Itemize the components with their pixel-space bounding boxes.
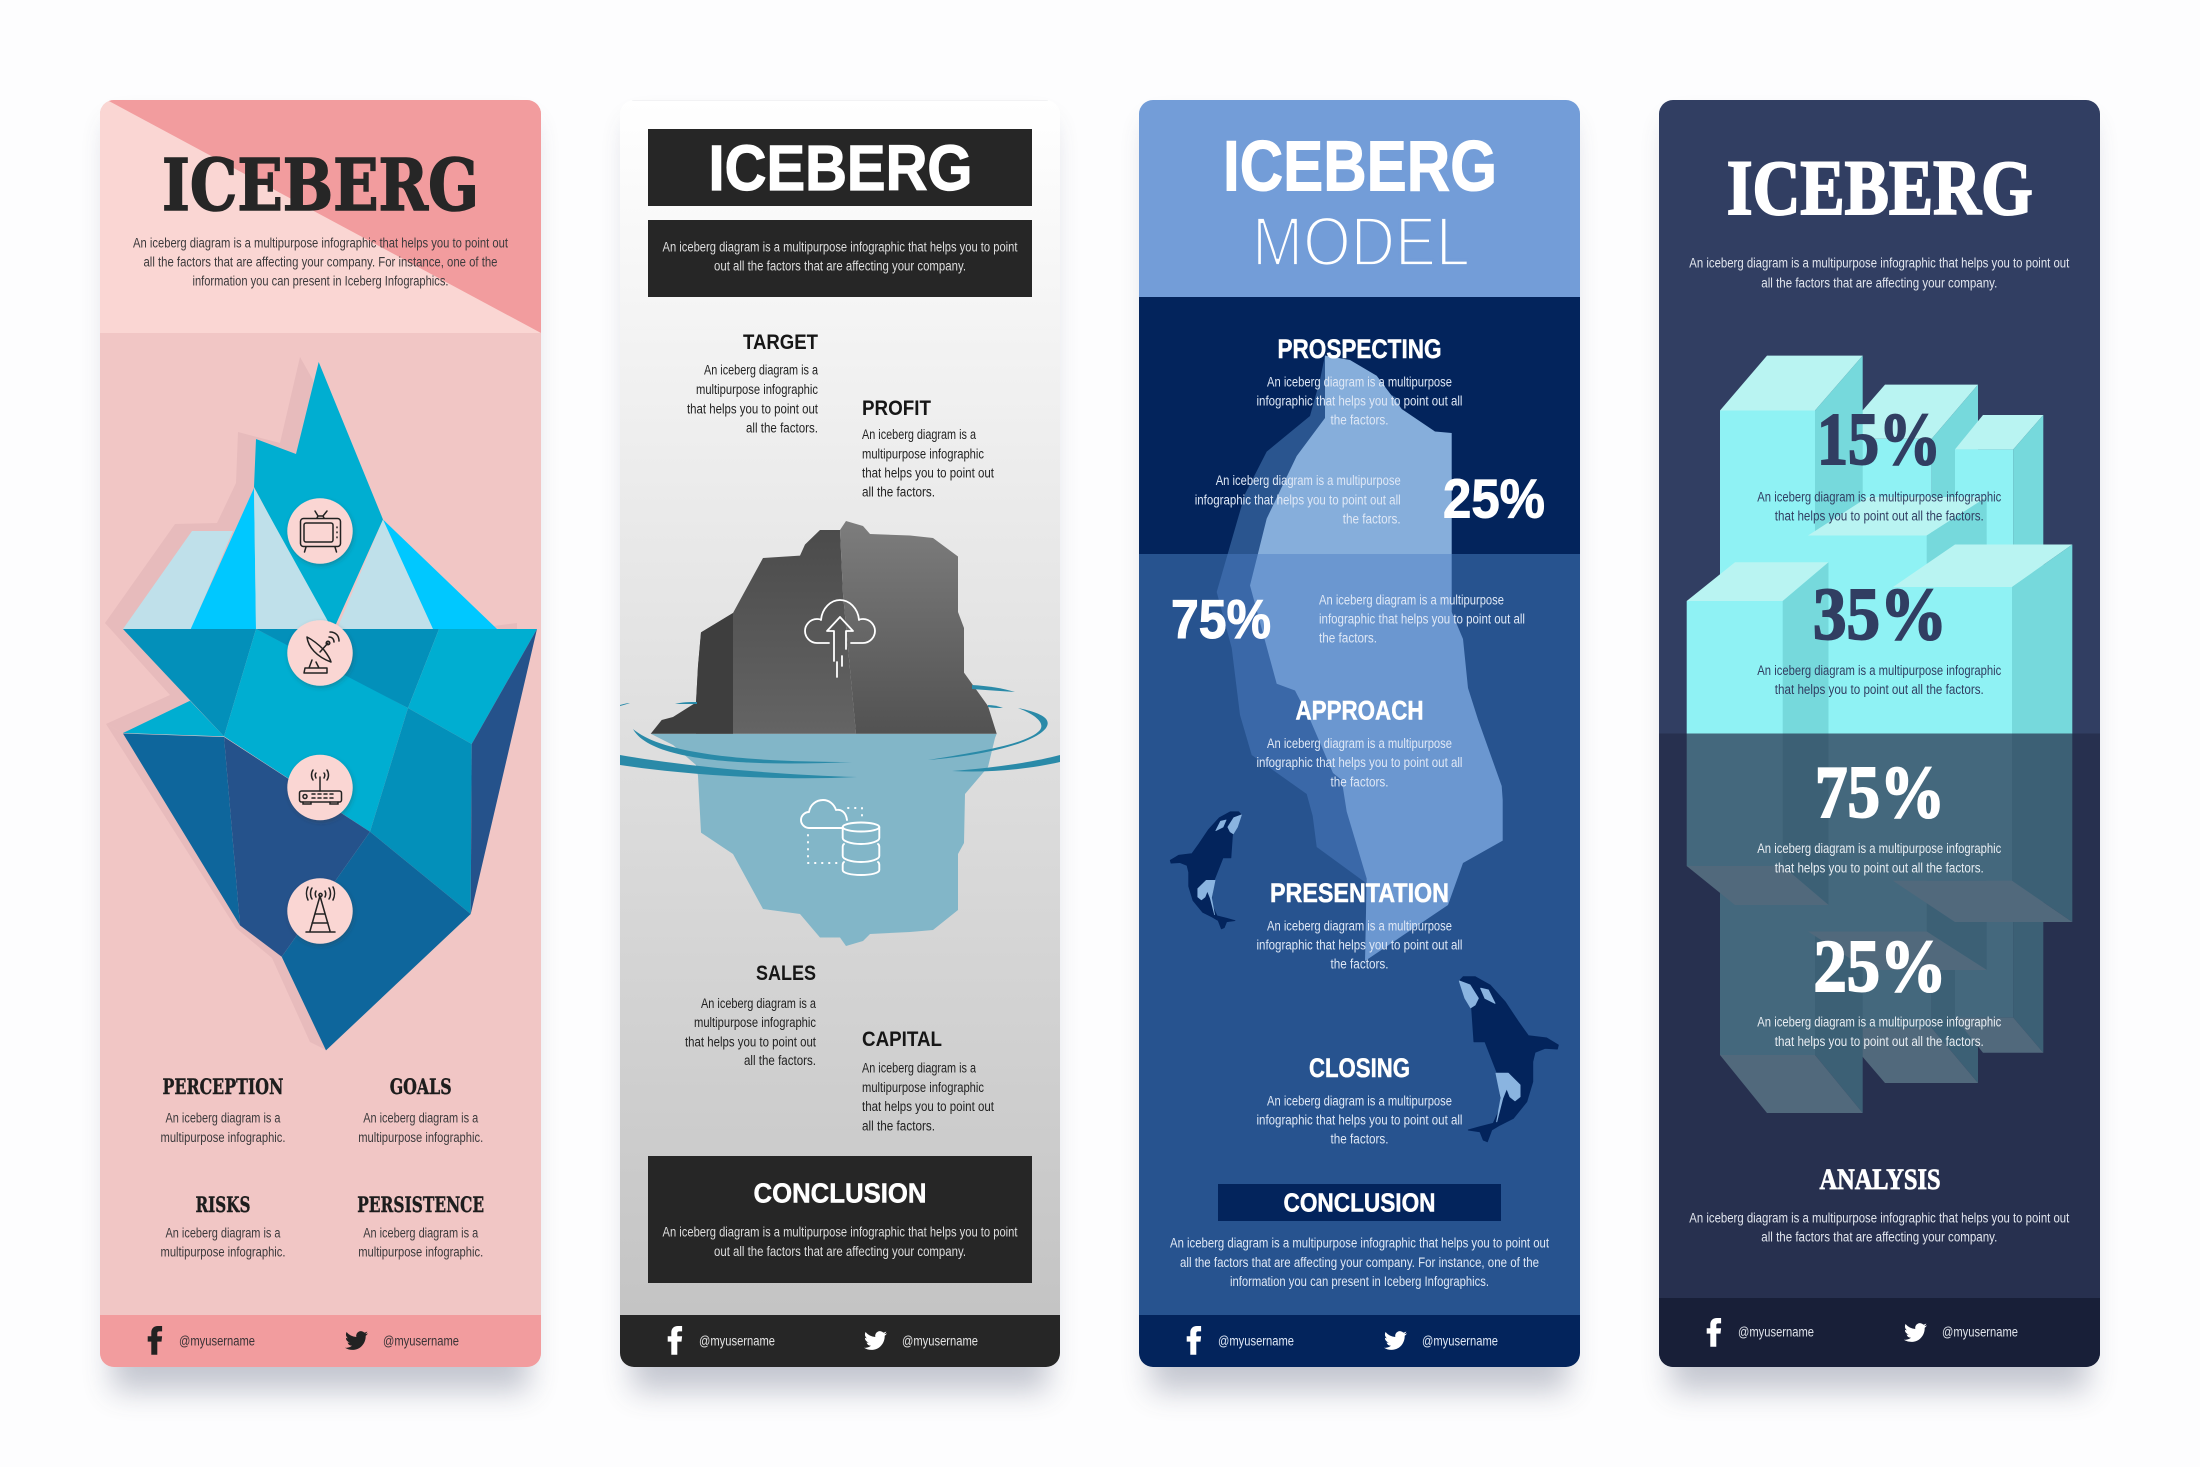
icon: router (287, 755, 353, 820)
stat: 25%: infographic that helps you to point out all (1195, 492, 1401, 508)
item: perception: PERCEPTION (162, 1074, 284, 1099)
footer: social: @myusername (1218, 1334, 1294, 1348)
intro text: An iceberg diagram is a multipurpose infographic that helps you to point out (133, 236, 508, 250)
icon: cloud upload (805, 600, 875, 677)
intro text: all the factors that are affecting your company. (1761, 276, 1997, 290)
item: target: all the factors. (746, 420, 818, 436)
item: capital: all the factors. (862, 1118, 935, 1134)
stat: 25%: An iceberg diagram is a multipurpose (1216, 473, 1401, 488)
intro text (1689, 256, 2069, 290)
stat: 25%: that helps you to point out all the factors. (1775, 1034, 1984, 1049)
stat: 25%: 25% (1443, 468, 1545, 530)
stat: 15%: 15% (1817, 399, 1941, 481)
icon: radio tower (287, 878, 353, 944)
water overlay (1659, 734, 2100, 1298)
item: sales: multipurpose infographic (694, 1015, 816, 1030)
panel: grey iceberg card (620, 100, 1060, 1367)
conclusion box: out all the factors that are affecting your company. (714, 1244, 966, 1259)
item: profit: that helps you to point out (862, 466, 994, 480)
footer: social (1139, 1315, 1580, 1367)
stat: 75%: 75% (1171, 588, 1271, 650)
footer: social: @myusername (1738, 1324, 1814, 1340)
title: ICEBERG (1223, 128, 1497, 206)
panel: pink iceberg card (100, 100, 541, 1367)
item: target: that helps you to point out (687, 402, 818, 416)
stat: 15%: An iceberg diagram is a multipurpose infographic (1757, 490, 2002, 504)
footer: social (1659, 1298, 2100, 1367)
intro text: all the factors that are affecting your company. For instance, one of the (144, 254, 498, 270)
section: closing: CLOSING (1309, 1053, 1410, 1083)
stat: 35%: that helps you to point out all the factors. (1775, 682, 1984, 697)
item: target: An iceberg diagram is a (704, 362, 818, 378)
item: goals (358, 1074, 483, 1145)
stat: 15% (1757, 399, 2002, 524)
intro text: information you can present in Iceberg Infographics. (192, 274, 448, 288)
item: risks: RISKS (196, 1192, 250, 1217)
item: risks: An iceberg diagram is a (166, 1226, 281, 1240)
iceberg: underwater part (651, 734, 997, 946)
item: profit: multipurpose infographic (862, 446, 984, 462)
footer: social (100, 1315, 541, 1367)
stat: 75%: that helps you to point out all the factors. (1775, 860, 1984, 876)
item: persistence (357, 1192, 484, 1260)
stat: 75% (1172, 594, 1524, 642)
section: presentation: PRESENTATION (1270, 878, 1449, 908)
item: goals: multipurpose infographic. (358, 1130, 483, 1145)
conclusion: An iceberg diagram is a multipurpose infographic that helps you to point out (1170, 1236, 1549, 1250)
section: prospecting (1256, 334, 1462, 428)
3D iceberg blocks (1687, 356, 2072, 1113)
item: target: TARGET (743, 331, 818, 354)
stat: 35%: 35% (1813, 574, 1947, 656)
section: prospecting: PROSPECTING (1278, 334, 1442, 364)
item: capital: that helps you to point out (862, 1099, 994, 1114)
footer: social: @myusername (1942, 1324, 2018, 1340)
item: profit: all the factors. (862, 484, 935, 500)
item: capital (862, 1028, 994, 1134)
item: goals: An iceberg diagram is a (363, 1110, 479, 1126)
item: perception: An iceberg diagram is a (166, 1110, 281, 1126)
item: sales: SALES (756, 962, 816, 985)
conclusion box (648, 1156, 1032, 1283)
icon: satellite dish (287, 620, 353, 686)
analysis: An iceberg diagram is a multipurpose infographic that helps you to point out (1689, 1210, 2069, 1226)
item: target (687, 331, 818, 436)
intro text (648, 220, 1032, 297)
stat: 35%: An iceberg diagram is a multipurpose infographic (1757, 663, 2002, 678)
block: middle (1808, 497, 1987, 970)
water ripples (620, 685, 1060, 778)
item: profit: PROFIT (862, 397, 931, 420)
item: persistence: An iceberg diagram is a (363, 1226, 479, 1240)
block: back right (1955, 415, 2043, 1053)
footer: social: @myusername (1422, 1334, 1498, 1348)
conclusion (1170, 1184, 1549, 1289)
section: presentation: infographic that helps you to point out all (1256, 938, 1462, 952)
icon: large orca (1459, 977, 1558, 1142)
stat: 75%: the factors. (1319, 630, 1377, 646)
section: approach: An iceberg diagram is a multipurpose (1267, 736, 1452, 751)
item: sales: all the factors. (744, 1053, 816, 1068)
icon: small orca (1170, 812, 1242, 929)
stat: 25% (1196, 475, 1544, 524)
title (1226, 140, 1494, 265)
stat: 75%: 75% (1815, 752, 1945, 834)
stat: 75%: An iceberg diagram is a multipurpose infographic (1757, 841, 2002, 856)
analysis: ANALYSIS (1820, 1163, 1940, 1196)
block: back left (1720, 356, 1863, 1113)
conclusion box: An iceberg diagram is a multipurpose infographic that helps you to point (662, 1224, 1018, 1240)
section: closing: An iceberg diagram is a multipurpose (1267, 1094, 1452, 1108)
stat: 25%: 25% (1814, 926, 1946, 1008)
header background (100, 100, 541, 333)
intro text: An iceberg diagram is a multipurpose infographic that helps you to point (662, 240, 1018, 254)
analysis: all the factors that are affecting your company. (1761, 1230, 1997, 1244)
conclusion box: CONCLUSION (754, 1178, 926, 1208)
title: MODEL (1252, 202, 1470, 280)
footer: social: @myusername (383, 1334, 459, 1348)
title: ICEBERG (708, 132, 972, 204)
item: sales: that helps you to point out (685, 1034, 816, 1050)
section: presentation: the factors. (1330, 956, 1388, 972)
item: perception (160, 1074, 286, 1145)
item: sales (685, 962, 816, 1068)
stat: 75% (1757, 752, 2002, 876)
title: ICEBERG (1727, 144, 2033, 231)
iceberg: rock above water (651, 521, 997, 734)
stat: 35% (1757, 574, 2002, 697)
section: approach: infographic that helps you to point out all (1256, 755, 1462, 770)
card shadows (112, 125, 2088, 1391)
stat: 75%: infographic that helps you to point out all (1319, 612, 1525, 626)
section: prospecting: the factors. (1330, 412, 1388, 428)
item: profit: An iceberg diagram is a (862, 427, 976, 442)
panel: navy 3D iceberg card (1659, 100, 2100, 1367)
item: risks: multipurpose infographic. (160, 1244, 286, 1260)
iceberg diagram (105, 357, 537, 1050)
item: risks (160, 1192, 286, 1260)
top edge line (632, 100, 1048, 101)
intro text: out all the factors that are affecting your company. (714, 258, 966, 274)
section: approach: the factors. (1330, 774, 1388, 790)
item: goals: GOALS (390, 1074, 452, 1099)
footer: social (620, 1315, 1060, 1367)
stat: 15%: that helps you to point out all the factors. (1775, 508, 1984, 524)
intro text (133, 236, 508, 288)
item: persistence: multipurpose infographic. (358, 1244, 483, 1260)
section: closing (1256, 1053, 1462, 1146)
item: capital: CAPITAL (862, 1028, 942, 1051)
block: back centre (1838, 385, 1978, 1083)
footer: social: @myusername (179, 1334, 255, 1348)
block: front left (1687, 562, 1828, 905)
item: sales: An iceberg diagram is a (701, 996, 816, 1011)
conclusion: all the factors that are affecting your company. For instance, one of the (1180, 1255, 1539, 1270)
item: persistence: PERSISTENCE (357, 1192, 484, 1217)
section: approach (1256, 696, 1462, 790)
icon: television (287, 498, 353, 564)
panel: blue iceberg model card (1139, 100, 1580, 1367)
iceberg silhouette (1217, 355, 1503, 961)
analysis (1689, 1163, 2069, 1244)
block: front right (1830, 544, 2072, 922)
section: closing: infographic that helps you to point out all (1256, 1112, 1462, 1128)
icon: cloud database (801, 800, 879, 875)
item: target: multipurpose infographic (696, 382, 818, 397)
section: closing: the factors. (1330, 1132, 1388, 1146)
title: ICEBERG (162, 143, 479, 227)
item: capital: multipurpose infographic (862, 1080, 984, 1095)
stat: 25% (1757, 926, 2002, 1049)
intro text: An iceberg diagram is a multipurpose infographic that helps you to point out (1689, 256, 2069, 270)
stat: 75%: An iceberg diagram is a multipurpose (1319, 592, 1504, 608)
footer: social: @myusername (902, 1334, 978, 1348)
item: capital: An iceberg diagram is a (862, 1060, 976, 1076)
section: prospecting: infographic that helps you to point out all (1256, 394, 1462, 408)
section: presentation (1256, 878, 1462, 972)
item: profit (862, 397, 994, 500)
conclusion: information you can present in Iceberg Infographics. (1230, 1274, 1489, 1289)
section: approach: APPROACH (1296, 696, 1424, 726)
section: prospecting: An iceberg diagram is a multipurpose (1267, 374, 1452, 390)
stat: 25%: An iceberg diagram is a multipurpose infographic (1757, 1014, 2002, 1030)
section: presentation: An iceberg diagram is a multipurpose (1267, 918, 1452, 934)
conclusion: CONCLUSION (1284, 1188, 1436, 1218)
item: perception: multipurpose infographic. (160, 1130, 286, 1145)
footer: social: @myusername (699, 1334, 775, 1348)
stat: 25%: the factors. (1343, 512, 1401, 526)
